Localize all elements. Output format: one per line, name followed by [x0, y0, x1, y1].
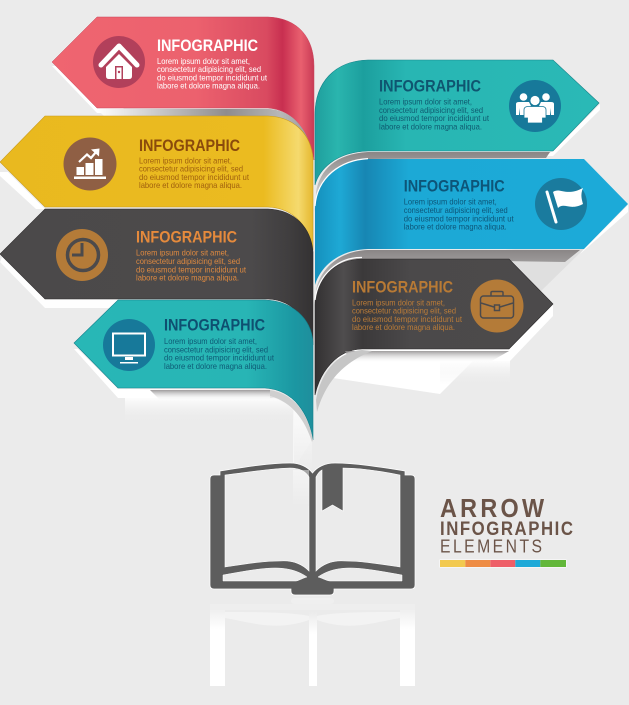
panel: ribbon 2, yellow	[0, 116, 313, 250]
heading: dark right: INFOGRAPHIC	[352, 277, 453, 296]
text block: dark right	[352, 297, 463, 332]
text block: blue: Lorem ipsum dolor sit amet,	[404, 197, 497, 207]
text block: dark right: labore et dolore magna aliqua.	[352, 322, 455, 332]
text block: dark right: do eiusmod tempor incididunt ut	[352, 314, 463, 324]
fold shadow under red	[97, 109, 313, 160]
left lower page	[223, 568, 307, 581]
panel: ribbon 7, dark, right	[315, 257, 553, 395]
grey shade under dark right	[345, 351, 509, 362]
grey shade under teal left	[150, 390, 285, 400]
text block: red	[157, 56, 268, 91]
icon: house	[93, 36, 145, 88]
text block: yellow: do eiusmod tempor incididunt ut	[139, 172, 250, 182]
text block: teal left: labore et dolore magna aliqua.	[164, 361, 267, 371]
book reflection	[210, 598, 415, 686]
heading: dark left: INFOGRAPHIC	[136, 228, 237, 247]
text block: teal left: consectetur adipisicing elit, sed	[164, 344, 268, 354]
text block: dark left	[136, 248, 247, 282]
heading: blue: INFOGRAPHIC	[404, 177, 505, 196]
fold shadow under teal right	[316, 152, 550, 200]
icon: briefcase	[470, 280, 524, 332]
text block: yellow: Lorem ipsum dolor sit amet,	[139, 155, 232, 165]
panel: ribbon 5, teal, right	[315, 60, 599, 185]
right lower page	[318, 568, 402, 581]
text block: dark left: do eiusmod tempor incididunt ut	[136, 264, 247, 274]
text block: teal right: Lorem ipsum dolor sit amet,	[379, 96, 472, 106]
icon: clock	[56, 229, 108, 281]
text block: red: Lorem ipsum dolor sit amet,	[157, 56, 250, 66]
icon: open book	[210, 463, 415, 595]
panel: ribbon 1, red	[52, 17, 314, 160]
text block: dark right: Lorem ipsum dolor sit amet,	[352, 297, 445, 307]
panel: ribbon 3, dark, left	[0, 209, 313, 345]
text block: dark right: consectetur adipisicing elit, sed	[352, 306, 456, 316]
text block: teal left: Lorem ipsum dolor sit amet,	[164, 336, 257, 346]
text block: dark left: consectetur adipisicing elit, sed	[136, 256, 240, 266]
right page with bookmark	[316, 468, 400, 571]
title: arrow infographic elements: INFOGRAPHIC	[440, 518, 573, 539]
title: arrow infographic elements: ARROW	[440, 495, 545, 523]
panel: ribbon 4, teal, left	[74, 300, 313, 440]
heading: teal left: INFOGRAPHIC	[164, 316, 265, 335]
panel: ribbon 6, blue, right	[315, 159, 628, 285]
text block: teal right	[379, 96, 490, 131]
icon: growth chart	[64, 138, 116, 190]
text block: dark left: labore et dolore magna aliqua.	[136, 272, 239, 282]
icon: flag	[535, 178, 587, 230]
text block: red: do eiusmod tempor incididunt ut	[157, 72, 268, 82]
text block: teal right: do eiusmod tempor incididunt ut	[379, 113, 490, 123]
heading: red: INFOGRAPHIC	[157, 36, 258, 55]
text block: teal right: consectetur adipisicing elit, sed	[379, 105, 483, 115]
heading: yellow: INFOGRAPHIC	[139, 136, 240, 155]
text block: yellow	[139, 155, 250, 190]
colour strip legend	[440, 560, 566, 568]
text block: blue	[404, 197, 514, 232]
text block: blue: do eiusmod tempor incididunt ut	[404, 213, 514, 223]
text block: teal left	[164, 336, 275, 371]
text block: yellow: consectetur adipisicing elit, sed	[139, 164, 243, 174]
text block: blue: labore et dolore magna aliqua.	[404, 222, 507, 232]
icon: monitor	[103, 319, 155, 371]
stem glow on left page	[293, 470, 309, 506]
heading: teal right: INFOGRAPHIC	[379, 76, 481, 96]
fold shadow under blue	[316, 250, 580, 300]
text block: teal right: labore et dolore magna aliqua.	[379, 121, 482, 131]
text block: yellow: labore et dolore magna aliqua.	[139, 180, 242, 190]
left page	[225, 468, 309, 571]
text block: red: consectetur adipisicing elit, sed	[157, 64, 261, 74]
text block: blue: consectetur adipisicing elit, sed	[404, 205, 508, 215]
title: arrow infographic elements	[440, 495, 573, 557]
icon: people	[509, 80, 561, 132]
text block: red: labore et dolore magna aliqua.	[157, 81, 260, 91]
title: arrow infographic elements: ELEMENTS	[440, 535, 542, 557]
text block: dark left: Lorem ipsum dolor sit amet,	[136, 248, 229, 258]
drop shadows behind ribbons	[0, 66, 628, 470]
text block: teal left: do eiusmod tempor incididunt ut	[164, 352, 275, 362]
